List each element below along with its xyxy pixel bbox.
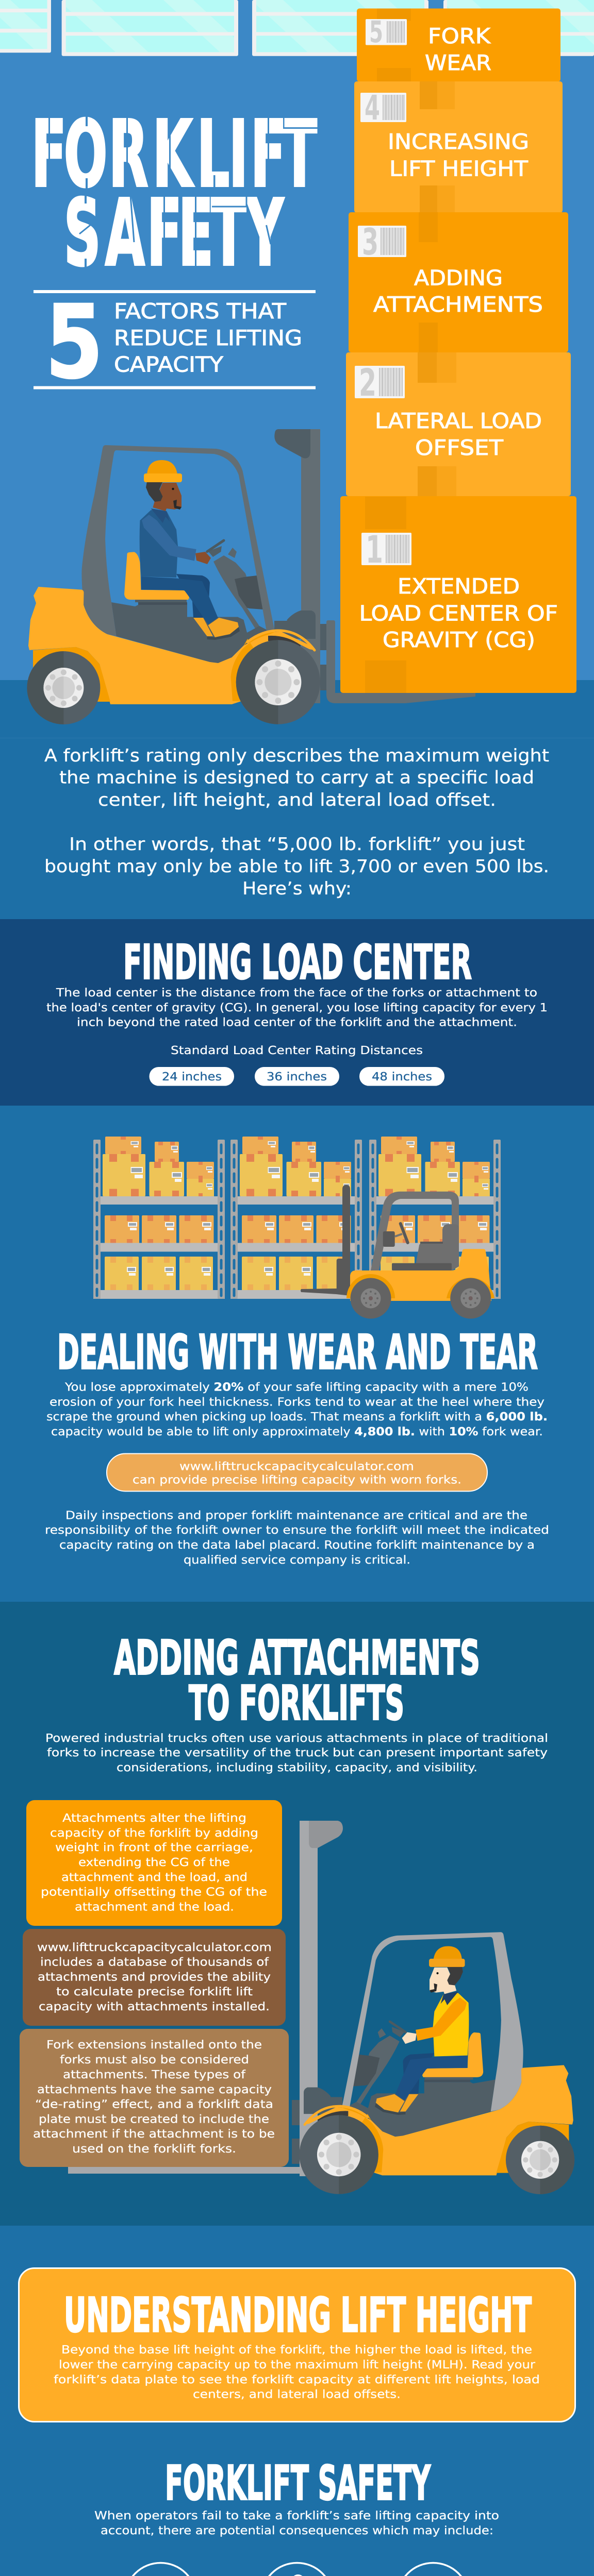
panel: attachments alter capacity: extending the CG of the [78, 1856, 230, 1869]
warehouse windows [0, 0, 594, 57]
box 5: fork wear: WEAR [425, 50, 491, 75]
panel: database of attachments: to calculate precise forklift lift [56, 1986, 253, 1998]
box 5: fork wear: 5 [369, 14, 383, 49]
pills: rating distances: 24 inches [162, 1071, 222, 1083]
panel: understanding lift height: forklift’s data plate to see the forklift capacity at different lift heights, load [54, 2374, 540, 2386]
panel: fork extensions: forks must also be considered [60, 2054, 249, 2066]
box 4: increasing lift height: INCREASING [388, 129, 529, 154]
panel: understanding lift height: lower the carrying capacity up to the maximum lift height (MLH). Read your [59, 2359, 536, 2371]
maintenance text: qualified service company is critical. [184, 1554, 410, 1567]
icon: property damage [107, 2563, 215, 2576]
safety intro text: When operators fail to take a forklift’s safe lifting capacity into [94, 2510, 499, 2522]
panel: attachments alter capacity [26, 1800, 282, 1926]
panel: fork extensions: attachments have the same capacity [37, 2083, 272, 2096]
maintenance text: Daily inspections and proper forklift maintenance are critical and are the [65, 1510, 527, 1522]
box 4: increasing lift height [354, 81, 563, 213]
box 4: increasing lift height: 4 [365, 88, 380, 128]
load center description: the load's center of gravity (CG). In general, you lose lifting capacity for every 1 [46, 1002, 548, 1014]
box 2: lateral load offset [346, 352, 571, 496]
wear and tear text: You lose approximately 20% of your safe lifting capacity with a mere 10% [64, 1381, 529, 1394]
forklift mast and forks [274, 429, 475, 703]
maintenance text: capacity rating on the data label placard. Routine forklift maintenance by a [59, 1539, 535, 1552]
attachments intro text: considerations, including stability, capacity, and visibility. [117, 1761, 477, 1774]
subtitle: 5 factors: REDUCE LIFTING [114, 326, 302, 350]
panel: understanding lift height: centers, and lateral load offsets. [193, 2388, 401, 2401]
forklift with attachment: driver and truck [299, 1932, 574, 2194]
callout: calculator pill [107, 1454, 487, 1491]
box 5: fork wear [357, 8, 560, 81]
section: lift height and safety [0, 2226, 594, 2576]
panel: database of attachments: includes a database of thousands of [40, 1956, 269, 1969]
icon: death [397, 2563, 469, 2576]
maintenance text: responsibility of the forklift owner to ensure the forklift will meet the indicated [45, 1524, 549, 1537]
panel: fork extensions: attachment if the attachment is to be [33, 2128, 275, 2141]
box 3: adding attachments: 3 [362, 221, 378, 263]
box 3: adding attachments: ATTACHMENTS [373, 292, 543, 317]
panel: fork extensions: “de-rating” effect, and a forklift data [35, 2098, 273, 2111]
panel: fork extensions: plate must be created to include the [39, 2113, 269, 2126]
panel: understanding lift height [19, 2268, 575, 2421]
callout: calculator pill: www.lifttruckcapacitycalculator.com [179, 1461, 414, 1473]
forklift with attachment: mast and forks [68, 1821, 343, 2176]
panel: attachments alter capacity: attachment and the load. [75, 1901, 234, 1913]
box 4: increasing lift height: LIFT HEIGHT [389, 157, 529, 181]
box 2: lateral load offset: 2 [359, 361, 376, 405]
heading: adding attachments to forklifts: TO FORKLIFTS [189, 1675, 404, 1731]
intro text: In other words, that “5,000 lb. forklift” you just [69, 834, 525, 855]
section: adding attachments [0, 1602, 594, 2226]
safety intro text: account, there are potential consequences which may include: [101, 2524, 493, 2537]
subtitle: 5 factors [34, 284, 316, 401]
pills: rating distances: 48 inches [372, 1071, 432, 1083]
subtitle: 5 factors: 5 [45, 284, 103, 401]
wear and tear text: erosion of your fork heel thickness. Forks tend to wear at the heel where they [50, 1396, 544, 1409]
panel: attachments alter capacity: attachment and the load, and [61, 1871, 248, 1884]
panel: attachments alter capacity: Attachments alter the lifting [62, 1812, 246, 1825]
title: SAFETY [64, 180, 284, 286]
subtitle: 5 factors: FACTORS THAT [114, 299, 287, 324]
safety intro text [94, 2510, 499, 2537]
load center description: The load center is the distance from the face of the forks or attachment to [56, 987, 537, 999]
panel: attachments alter capacity: potentially offsetting the CG of the [41, 1886, 267, 1899]
wear and tear text: scrape the ground when picking up loads. That means a forklift with a 6,000 lb. [46, 1411, 548, 1423]
intro text: Here’s why: [242, 878, 352, 899]
attachments intro text [45, 1732, 548, 1774]
panel: fork extensions: used on the forklift forks. [72, 2143, 236, 2156]
section: dealing with wear and tear [0, 1106, 594, 1602]
title: FORKLIFT [31, 101, 317, 207]
panel: understanding lift height: Beyond the base lift height of the forklift, the higher the load is lifted, the [61, 2344, 532, 2357]
box 5: fork wear: FORK [428, 24, 491, 48]
box 1: extended load center of gravity: 1 [366, 528, 383, 572]
rating distances label: Standard Load Center Rating Distances [171, 1044, 423, 1057]
panel: fork extensions: Fork extensions installed onto the [46, 2039, 262, 2052]
section: finding load center [0, 919, 594, 1106]
attachments intro text: forks to increase the versatility of the truck but can present important safety [47, 1747, 548, 1759]
icon: injury [261, 2563, 333, 2576]
wear and tear text: capacity would be able to lift only approximately 4,800 lb. with 10% fork wear. [51, 1426, 543, 1438]
warehouse racks with boxes [93, 1137, 501, 1299]
box 2: lateral load offset: OFFSET [415, 435, 504, 460]
box 2: lateral load offset: LATERAL LOAD [375, 409, 542, 433]
intro text: the machine is designed to carry at a specific load [59, 768, 534, 788]
callout: calculator pill: can provide precise lifting capacity with worn forks. [133, 1473, 461, 1487]
panel: database of attachments [23, 1929, 286, 2026]
panel: database of attachments: capacity with attachments installed. [39, 2001, 270, 2013]
subtitle: 5 factors: CAPACITY [114, 352, 224, 377]
intro text: A forklift’s rating only describes the maximum weight [44, 745, 549, 766]
intro text: center, lift height, and lateral load offset. [98, 790, 496, 810]
box 3: adding attachments [349, 212, 568, 352]
attachments intro text: Powered industrial trucks often use various attachments in place of traditional [45, 1732, 548, 1745]
box 1: extended load center of gravity: GRAVITY (CG) [383, 628, 535, 652]
small forklift illustration [301, 1185, 494, 1319]
panel: fork extensions: attachments. These types of [63, 2069, 246, 2081]
panel: database of attachments: www.lifttruckcapacitycalculator.com [37, 1941, 272, 1954]
panel: attachments alter capacity: weight in front of the carriage, [55, 1841, 253, 1854]
box 1: extended load center of gravity [340, 496, 576, 693]
box 1: extended load center of gravity: EXTENDED [398, 574, 520, 599]
maintenance text [45, 1510, 549, 1567]
box 3: adding attachments: ADDING [414, 266, 503, 291]
hero section [0, 0, 594, 919]
panel: attachments alter capacity: capacity of the forklift by adding [50, 1827, 258, 1840]
panel: fork extensions [20, 2029, 289, 2167]
box 1: extended load center of gravity: LOAD CENTER OF [359, 601, 558, 625]
pills: rating distances [150, 1067, 444, 1086]
pills: rating distances: 36 inches [267, 1071, 327, 1083]
panel: database of attachments: attachments and provides the ability [38, 1971, 271, 1984]
forklift with driver [27, 445, 320, 724]
title [31, 101, 318, 286]
intro text: bought may only be able to lift 3,700 or even 500 lbs. [44, 856, 549, 877]
load center description: inch beyond the rated load center of the forklift and the attachment. [77, 1016, 517, 1029]
heading: adding attachments to forklifts [114, 1630, 480, 1731]
intro text [44, 745, 549, 899]
wear and tear text [46, 1381, 548, 1438]
load center description [46, 987, 548, 1029]
